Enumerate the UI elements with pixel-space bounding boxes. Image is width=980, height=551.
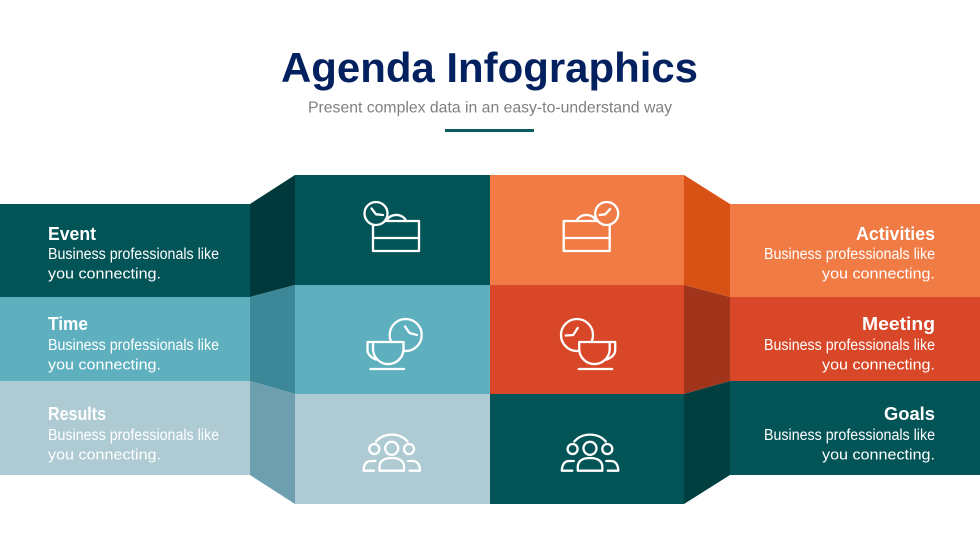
Event centre block [295,175,490,285]
Activities description: you connecting. [822,266,935,282]
Event description: you connecting. [48,266,161,282]
Goals centre block [490,394,684,504]
Goals description: Business professionals like [764,427,935,444]
icon: cup with clock [368,319,422,369]
Event bar [0,204,250,297]
panel: Time [0,285,490,394]
Time centre block [295,285,490,394]
title: Agenda Infographics [281,44,698,91]
Meeting centre block [490,285,684,394]
panel: Results [0,381,490,504]
Meeting description: you connecting. [822,356,935,374]
Goals side face [684,381,730,504]
Goals bar [730,381,980,475]
Activities centre block [490,175,684,285]
panel: Meeting [490,285,980,394]
icon: briefcase with clock [564,202,618,251]
Time heading: Time [48,313,88,334]
Event description: Business professionals like [48,246,219,263]
Meeting heading: Meeting [862,313,935,334]
icon: people [364,435,420,471]
panel: Activities [490,175,980,297]
Meeting side face [684,285,730,394]
Event heading: Event [48,223,96,244]
icon: cup with clock [561,319,615,369]
Goals description: you connecting. [822,446,935,464]
Meeting description: Business professionals like [764,337,935,354]
Time bar [0,297,250,381]
Activities side face [684,175,730,297]
Activities bar [730,204,980,297]
Meeting bar [730,297,980,381]
Time side face [250,285,295,394]
Activities heading: Activities [856,223,935,244]
Results side face [250,381,295,504]
Goals heading: Goals [884,403,935,424]
Results bar [0,381,250,475]
Results description: Business professionals like [48,427,219,444]
panel: Event [0,175,490,297]
Event side face [250,175,295,297]
subtitle: Present complex data in an easy-to-understand way [308,100,672,116]
Results centre block [295,394,490,504]
Time description: you connecting. [48,356,161,374]
Activities description: Business professionals like [764,246,935,263]
Results description: you connecting. [48,446,161,464]
icon: people [562,435,618,471]
title underline [445,129,534,132]
Time description: Business professionals like [48,337,219,354]
panel: Goals [490,381,980,504]
icon: briefcase with clock [364,202,419,251]
Results heading: Results [48,403,106,424]
